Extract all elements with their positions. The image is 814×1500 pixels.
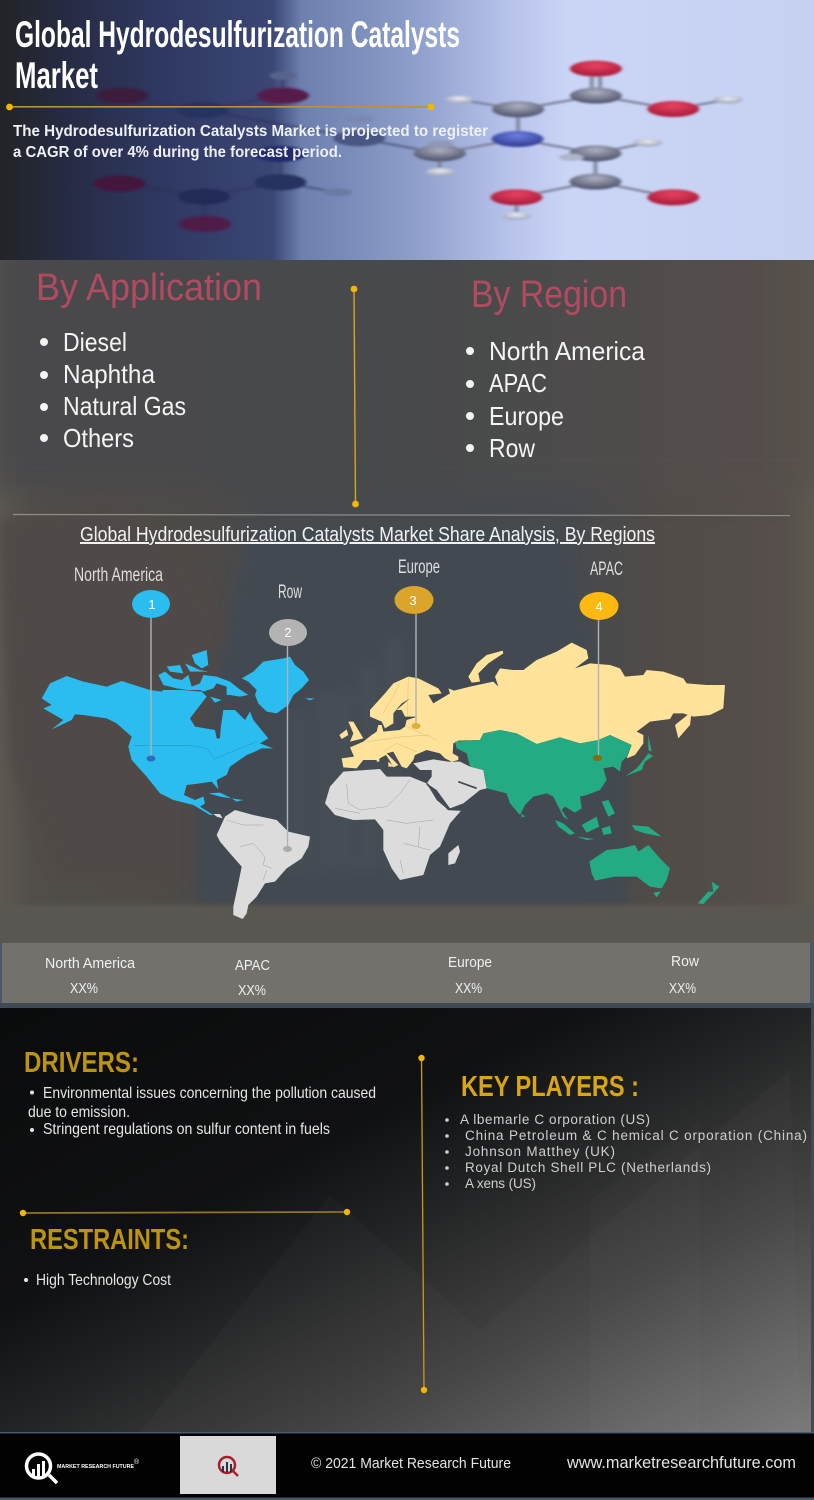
text: restraints list: High Technology Cost: [36, 1272, 171, 1289]
logo: market research future: ®: [134, 1458, 140, 1466]
subtitle: The Hydrodesulfurization Catalysts Market is projected to register: [13, 123, 488, 140]
heading: by application: By Application: [36, 267, 262, 309]
title: Market: [15, 55, 98, 96]
text: key players list: A lbemarle C orporation (US): [460, 1112, 650, 1127]
heading: by region: By Region: [471, 274, 627, 316]
text: key players list: Royal Dutch Shell PLC (Netherlands): [465, 1160, 711, 1175]
list: regions: Europe: [489, 401, 564, 431]
pin: row: 2: [284, 625, 292, 640]
list: applications: Diesel: [63, 327, 127, 357]
heading: restraints: RESTRAINTS:: [30, 1224, 189, 1256]
pin: apac: APAC: [590, 559, 623, 580]
list: applications: [40, 327, 186, 453]
list: regions: [466, 336, 645, 463]
panel: share strip: [0, 943, 814, 1008]
logo: market research future: MARKET RESEARCH FUTURE: [57, 1464, 134, 1470]
pin: apac: 4: [595, 599, 603, 614]
pin: north america: 1: [148, 597, 156, 612]
logo: market research future: [26, 1454, 140, 1483]
horizontal divider: [20, 1209, 350, 1216]
panel: drivers, restraints and key players: [0, 1008, 814, 1432]
website: www.marketresearchfuture.com: [566, 1453, 796, 1472]
vertical divider: [351, 286, 359, 507]
panel: footer: [0, 1432, 814, 1500]
panel: share strip: XX%: [669, 980, 696, 997]
vertical divider: [418, 1055, 427, 1393]
pin: north america: [74, 565, 170, 762]
panel: share strip: North America: [45, 955, 136, 972]
panel: segmentation and map background: [0, 220, 814, 1005]
panel: share strip: Row: [671, 953, 699, 970]
panel: share strip: XX%: [455, 980, 482, 997]
list: regions: Row: [489, 433, 535, 463]
panel: share strip: XX%: [238, 982, 266, 999]
title: [15, 14, 460, 96]
text: key players list: Johnson Matthey (UK): [465, 1144, 615, 1159]
pin: north america: North America: [74, 565, 163, 586]
map: europe and russia: [339, 643, 725, 768]
pin: europe: Europe: [398, 557, 440, 578]
list: applications: Natural Gas: [63, 391, 186, 421]
list: regions: North America: [489, 336, 645, 366]
logo box: [180, 1436, 276, 1494]
heading: key players: KEY PLAYERS :: [461, 1071, 639, 1103]
panel: share strip: APAC: [235, 957, 270, 974]
subtitle: [13, 123, 488, 161]
title divider: [6, 104, 434, 110]
text: key players list: China Petroleum & C hemical C orporation (China): [465, 1128, 807, 1143]
heading: drivers: DRIVERS:: [24, 1047, 139, 1079]
pin: europe: 3: [409, 593, 417, 608]
list: applications: Naphtha: [63, 359, 155, 389]
map: asia pacific: [455, 730, 719, 904]
panel: share strip: Europe: [448, 954, 492, 971]
chart title: Global Hydrodesulfurization Catalysts Market Share Analysis, By Regions: [80, 524, 655, 546]
pin: row: Row: [278, 582, 302, 603]
map: africa and middle east: [325, 759, 487, 880]
pin: row: [269, 582, 307, 852]
map: north america: [42, 650, 315, 815]
panel: share strip: XX%: [70, 980, 98, 997]
text: drivers list: [28, 1085, 376, 1138]
subtitle: a CAGR of over 4% during the forecast period.: [13, 144, 342, 161]
title: Global Hydrodesulfurization Catalysts: [15, 14, 460, 55]
pin: europe: [394, 557, 440, 729]
text: drivers list: due to emission.: [28, 1104, 130, 1121]
text: key players list: A xens (US): [465, 1176, 536, 1191]
map: south america: [213, 810, 310, 919]
list: applications: Others: [63, 423, 134, 453]
panel: header banner: [0, 0, 814, 260]
pin: apac: [580, 559, 623, 761]
text: drivers list: Environmental issues concerning the pollution caused: [43, 1085, 376, 1102]
text: drivers list: Stringent regulations on sulfur content in fuels: [43, 1121, 330, 1138]
world map: [42, 643, 725, 919]
list: regions: APAC: [489, 368, 547, 398]
text: key players list: [445, 1112, 807, 1191]
molecule illustration: [65, 61, 743, 232]
copyright: © 2021 Market Research Future: [311, 1455, 511, 1472]
